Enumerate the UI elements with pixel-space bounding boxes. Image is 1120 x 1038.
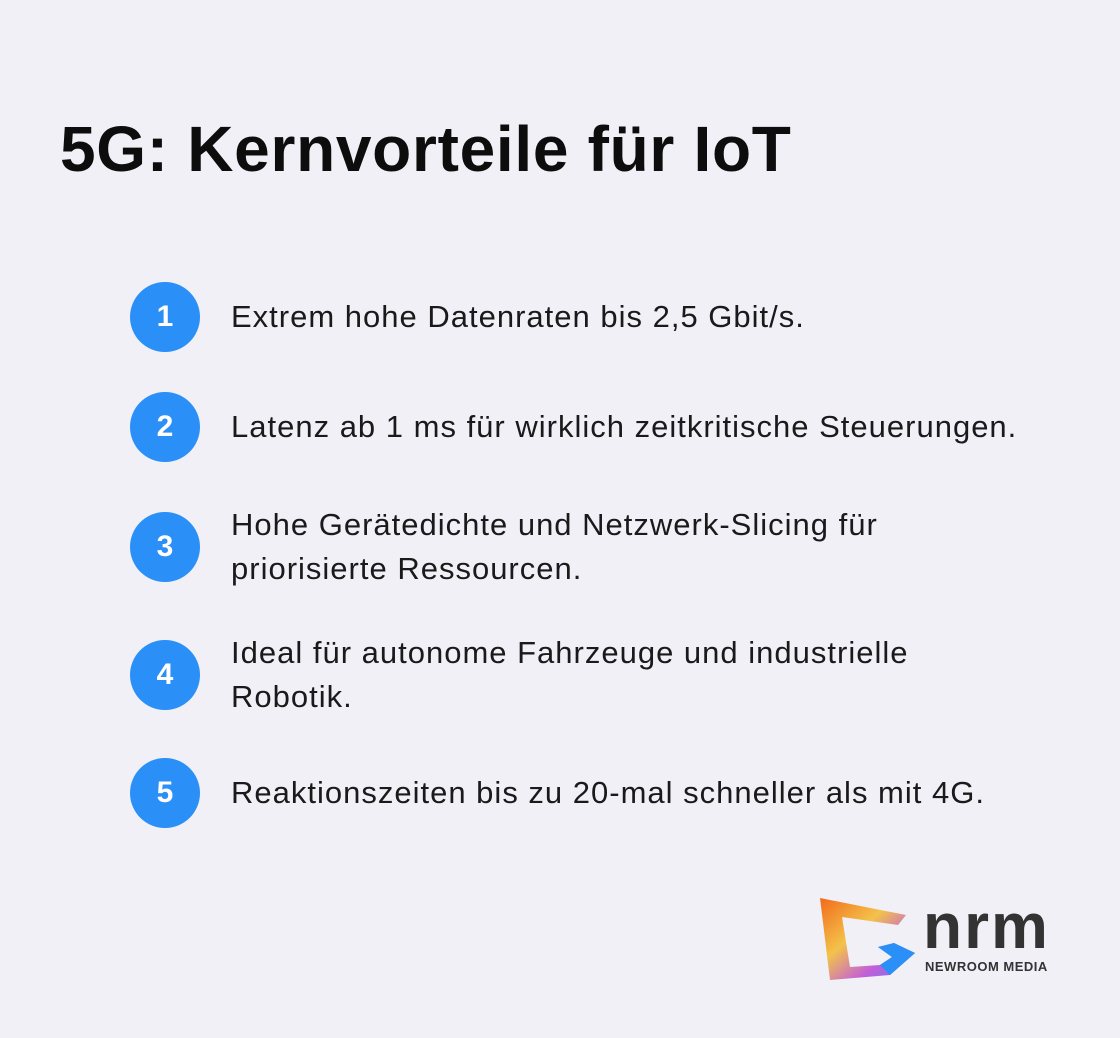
logo subtitle: NEWROOM MEDIA	[925, 959, 1048, 974]
title: 5G: Kernvorteile für IoT	[60, 113, 792, 185]
text 4: Ideal für autonome Fahrzeuge und industrielle	[231, 635, 908, 670]
text 4	[231, 635, 908, 714]
badge 2	[130, 392, 200, 462]
badge 4	[130, 640, 200, 710]
badge 1	[130, 282, 200, 352]
text 5: Reaktionszeiten bis zu 20-mal schneller als mit 4G.	[231, 775, 985, 810]
text 3: priorisierte Ressourcen.	[231, 551, 582, 586]
item 3	[130, 507, 878, 586]
icon: logo mark	[820, 898, 915, 980]
badge 5	[130, 758, 200, 828]
text 1: Extrem hohe Datenraten bis 2,5 Gbit/s.	[231, 299, 805, 334]
badge 2: 2	[157, 410, 173, 443]
logo text: nrm	[923, 890, 1050, 962]
badge 1: 1	[157, 300, 173, 333]
text 4: Robotik.	[231, 679, 353, 714]
logo	[820, 890, 1050, 980]
item 5	[130, 758, 985, 828]
badge 5: 5	[157, 776, 173, 809]
badge 3: 3	[157, 530, 173, 563]
text 3: Hohe Gerätedichte und Netzwerk-Slicing für	[231, 507, 878, 542]
item 2	[130, 392, 1017, 462]
badge 4: 4	[157, 658, 173, 691]
item 4	[130, 635, 908, 714]
text 2: Latenz ab 1 ms für wirklich zeitkritische Steuerungen.	[231, 409, 1017, 444]
item 1	[130, 282, 805, 352]
badge 3	[130, 512, 200, 582]
text 3	[231, 507, 878, 586]
